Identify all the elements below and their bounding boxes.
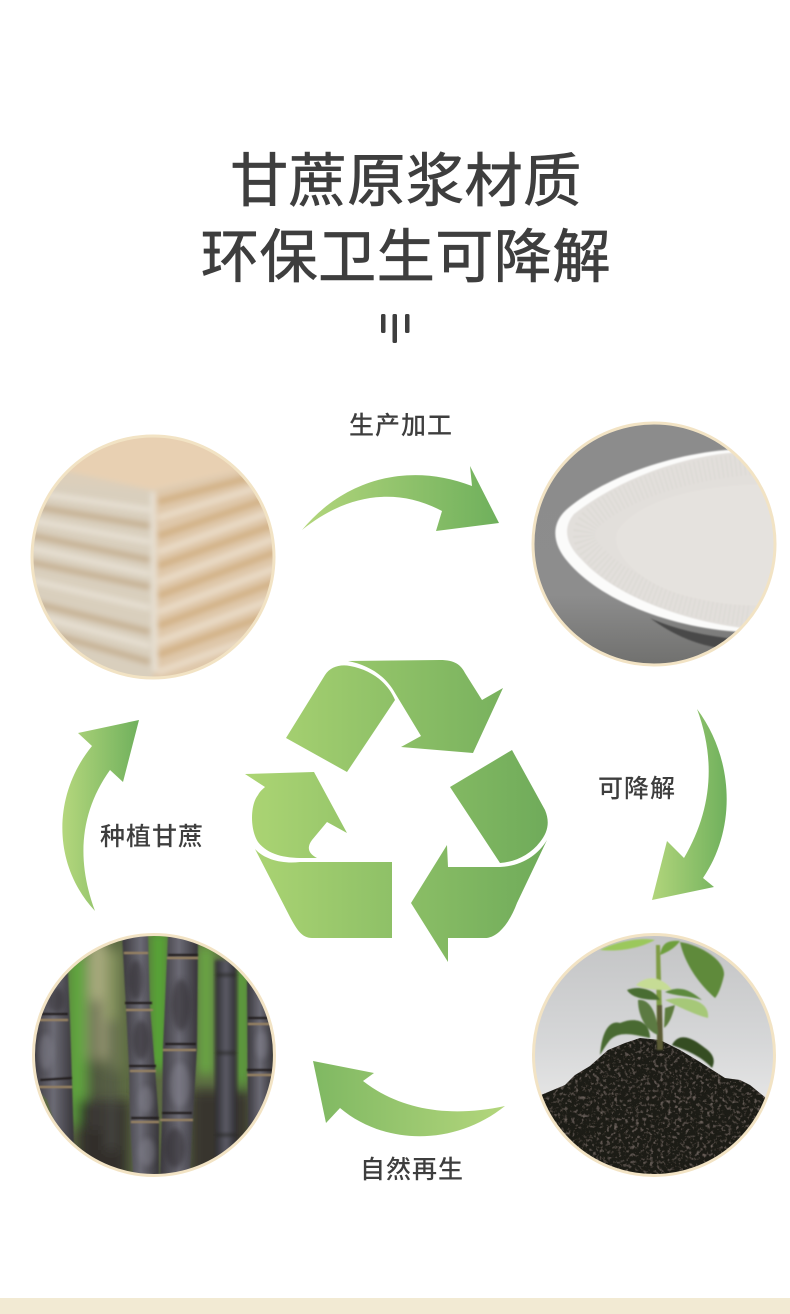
arrow: cane to wood [62,720,139,911]
footer band [0,1298,790,1314]
title line 1: 甘蔗原浆材质 [230,149,582,214]
title [201,149,611,290]
recycle arrow left [245,772,347,858]
recycle arrow top right [348,660,503,753]
photo: wood pulp board [30,434,276,680]
label: planting sugarcane: 种植甘蔗 [100,823,204,851]
arrow: plate to soil [652,709,727,900]
photo: sugarcane pulp plate [530,420,790,670]
leaves [680,942,724,998]
recycle band bottom left [255,849,392,938]
recycle band top left [286,665,395,772]
blurred background cane [215,960,237,1160]
label: natural regeneration: 自然再生 [360,1156,464,1184]
stem [656,945,663,1050]
photo: sugarcane stalks [30,930,280,1190]
icon: recycling symbol [245,660,548,962]
arrow: soil to cane [313,1061,505,1136]
recycle band right [450,750,548,863]
title line 2: 环保卫生可降解 [201,225,611,290]
soil mound [541,1038,766,1175]
label: production: 生产加工 [349,412,453,440]
photo: seedling in soil [530,930,780,1180]
label: degradable: 可降解 [598,775,676,803]
icon: three vertical bars [381,314,410,343]
recycle arrow bottom right [411,840,547,962]
arrow: wood to plate [302,466,499,531]
